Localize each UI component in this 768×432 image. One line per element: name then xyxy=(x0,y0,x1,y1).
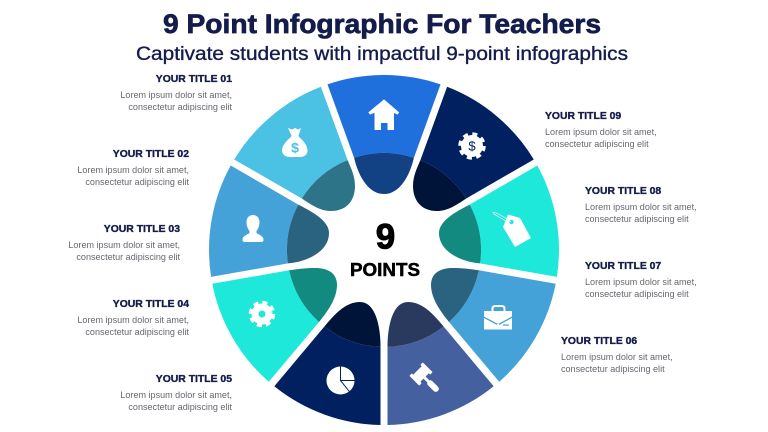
segment: tag xyxy=(439,166,559,277)
segment: money bag xyxy=(234,87,355,211)
text block: title 03: YOUR TITLE 03 xyxy=(104,224,180,235)
icon: gavel xyxy=(409,362,445,398)
petal: briefcase xyxy=(431,268,479,322)
text block: title 02: Lorem ipsum dolor sit amet, xyxy=(77,165,189,175)
text block: title 03: Lorem ipsum dolor sit amet, xyxy=(68,240,180,250)
text block: title 06 xyxy=(561,336,673,374)
segment: gear dollar xyxy=(413,87,534,211)
text block: title 06: consectetur adipiscing elit xyxy=(561,364,665,374)
petal: tag xyxy=(439,205,481,263)
petal: gear dollar xyxy=(413,160,466,211)
segment: gear xyxy=(212,268,337,382)
text block: title 01 xyxy=(120,74,232,112)
petal: person xyxy=(287,205,329,263)
petal: gear xyxy=(289,268,337,322)
subtitle: Captivate students with impactful 9-point infographics xyxy=(136,44,628,65)
text block: title 07: YOUR TITLE 07 xyxy=(585,261,661,272)
center label: POINTS xyxy=(350,260,420,280)
text block: title 05: Lorem ipsum dolor sit amet, xyxy=(120,390,232,400)
text block: title 09: YOUR TITLE 09 xyxy=(545,111,621,122)
text block: title 04: YOUR TITLE 04 xyxy=(113,299,189,310)
title: 9 Point Infographic For Teachers xyxy=(163,9,601,39)
text block: title 04: Lorem ipsum dolor sit amet, xyxy=(77,315,189,325)
text block: title 02: YOUR TITLE 02 xyxy=(113,149,189,160)
text block: title 08 xyxy=(585,186,697,224)
segment: briefcase xyxy=(431,268,556,382)
center label xyxy=(350,218,420,280)
text block: title 06: YOUR TITLE 06 xyxy=(561,336,637,347)
text block: title 05: YOUR TITLE 05 xyxy=(156,374,232,385)
text block: title 09 xyxy=(545,111,657,149)
text block: title 07: Lorem ipsum dolor sit amet, xyxy=(585,277,697,287)
segment: home xyxy=(328,75,440,194)
text block: title 08: Lorem ipsum dolor sit amet, xyxy=(585,202,697,212)
icon: person xyxy=(242,215,264,242)
petal: home xyxy=(354,153,414,194)
text block: title 02 xyxy=(77,149,189,187)
icon: briefcase xyxy=(484,306,512,330)
segment: pie chart xyxy=(274,302,380,425)
icon: money bag: $ xyxy=(291,140,299,156)
text block: title 03: consectetur adipiscing elit xyxy=(76,252,180,262)
text block: title 02: consectetur adipiscing elit xyxy=(85,177,189,187)
text block: title 07: consectetur adipiscing elit xyxy=(585,289,689,299)
text block: title 03 xyxy=(68,224,180,262)
text block: title 09: consectetur adipiscing elit xyxy=(545,139,649,149)
segment: gavel xyxy=(388,302,494,425)
text block: title 08: consectetur adipiscing elit xyxy=(585,214,689,224)
icon: gear dollar: $ xyxy=(468,138,476,154)
petal: money bag xyxy=(302,160,355,211)
text block: title 04: consectetur adipiscing elit xyxy=(85,327,189,337)
petal: pie chart xyxy=(324,302,380,347)
center label: 9 xyxy=(376,218,395,256)
icon: pie chart xyxy=(326,365,356,394)
text block: title 01: consectetur adipiscing elit xyxy=(128,102,232,112)
text block: title 01: Lorem ipsum dolor sit amet, xyxy=(120,90,232,100)
text block: title 05 xyxy=(120,374,232,412)
petal: gavel xyxy=(388,302,444,347)
icon: gear xyxy=(250,302,274,326)
segment: person xyxy=(209,166,329,277)
text block: title 05: consectetur adipiscing elit xyxy=(128,402,232,412)
text block: title 04 xyxy=(77,299,189,337)
text block: title 07 xyxy=(585,261,697,299)
icon: tag xyxy=(493,212,531,247)
text block: title 08: YOUR TITLE 08 xyxy=(585,186,661,197)
text block: title 09: Lorem ipsum dolor sit amet, xyxy=(545,127,657,137)
icon: home xyxy=(369,100,398,130)
text block: title 06: Lorem ipsum dolor sit amet, xyxy=(561,352,673,362)
text block: title 01: YOUR TITLE 01 xyxy=(156,74,232,85)
